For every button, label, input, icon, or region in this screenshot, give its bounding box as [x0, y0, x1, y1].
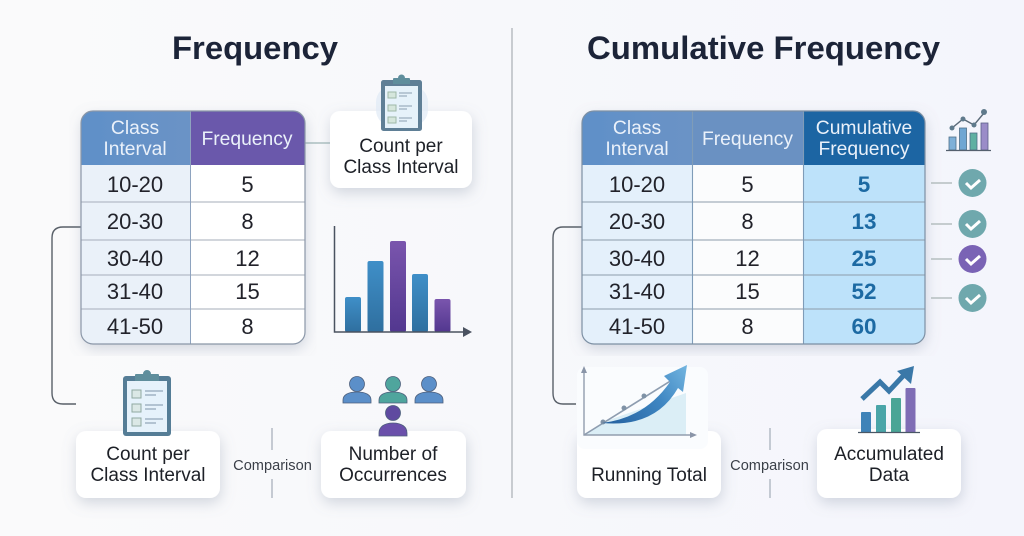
check markers [931, 169, 986, 312]
cumulative column: 5 [858, 172, 870, 197]
class interval column: 10-20 [609, 172, 665, 197]
comparison label left [233, 428, 312, 498]
frequency column: 15 [735, 279, 760, 304]
callout: count per class interval [330, 111, 472, 188]
cumulative column: 60 [851, 314, 877, 339]
card: running total: Running Total [591, 465, 707, 486]
comparison label right: Comparison [730, 458, 809, 474]
class interval column: 10-20 [107, 172, 163, 197]
card: count per class interval: Count per [106, 444, 190, 465]
frequency column: 8 [741, 314, 754, 339]
icon: check 4 [958, 284, 986, 312]
header cells: Interval [605, 139, 669, 160]
frequency column: 8 [241, 314, 254, 339]
icon: small bar and line chart [946, 109, 991, 150]
cumulative column [851, 172, 877, 339]
frequency column: 12 [235, 246, 260, 271]
icon: growth bars with arrow [858, 366, 920, 433]
card: running total [577, 431, 721, 498]
class interval column: 20-30 [107, 209, 163, 234]
panel: cumulative frequency table [582, 111, 925, 344]
callout: count per class interval: Class Interval [343, 157, 459, 178]
header cells: Interval [103, 139, 167, 160]
header cells: Cumulative [816, 118, 912, 139]
icon: check 3 [958, 245, 986, 273]
frequency column: 8 [741, 209, 754, 234]
card: number of occurrences [321, 431, 466, 498]
cumulative column: 25 [851, 246, 877, 271]
header cells [103, 118, 293, 160]
header cells: Class [111, 118, 159, 139]
icon: clipboard top [376, 74, 428, 131]
icon: rising arrow chart [577, 365, 708, 449]
class interval column: 41-50 [609, 314, 665, 339]
class interval column [609, 172, 665, 339]
class interval column [107, 172, 163, 339]
connector: header to callout [305, 142, 330, 144]
comparison label right [730, 428, 809, 498]
header cells: Frequency [702, 129, 793, 150]
frequency column [735, 172, 760, 339]
card: accumulated data: Accumulated [834, 444, 944, 465]
title: Frequency: Frequency [172, 30, 338, 66]
callout: count per class interval: Count per [359, 136, 443, 157]
frequency column: 5 [241, 172, 254, 197]
frequency column: 8 [241, 209, 254, 234]
class interval column: 31-40 [107, 279, 163, 304]
class interval column: 31-40 [609, 279, 665, 304]
frequency column [235, 172, 260, 339]
header cells [605, 118, 912, 160]
title: Cumulative Frequency: Cumulative Frequency [587, 30, 940, 66]
card: count per class interval: Class Interval [90, 465, 206, 486]
chart: frequency bars [334, 226, 472, 337]
frequency column: 5 [741, 172, 754, 197]
class interval column: 20-30 [609, 209, 665, 234]
comparison label left: Comparison [233, 458, 312, 474]
frequency column: 15 [235, 279, 260, 304]
header cells: Class [613, 118, 661, 139]
icon: check 2 [958, 210, 986, 238]
card: count per class interval [76, 431, 220, 498]
connector: right table to chart [553, 227, 582, 404]
icon: clipboard bottom [123, 370, 171, 436]
card: accumulated data: Data [869, 465, 909, 486]
panel: frequency table [81, 111, 305, 344]
header cells: Frequency [201, 129, 293, 150]
cumulative column: 13 [851, 209, 877, 234]
icon: people [343, 376, 443, 436]
class interval column: 30-40 [107, 246, 163, 271]
cumulative column: 52 [851, 279, 877, 304]
icon: check 1 [958, 169, 986, 197]
connector: left table to clipboard [52, 227, 81, 404]
card: number of occurrences: Occurrences [339, 465, 447, 486]
card: accumulated data [817, 429, 961, 498]
card: number of occurrences: Number of [349, 444, 438, 465]
class interval column: 41-50 [107, 314, 163, 339]
class interval column: 30-40 [609, 246, 665, 271]
frequency column: 12 [735, 246, 760, 271]
header cells: Frequency [818, 139, 910, 160]
